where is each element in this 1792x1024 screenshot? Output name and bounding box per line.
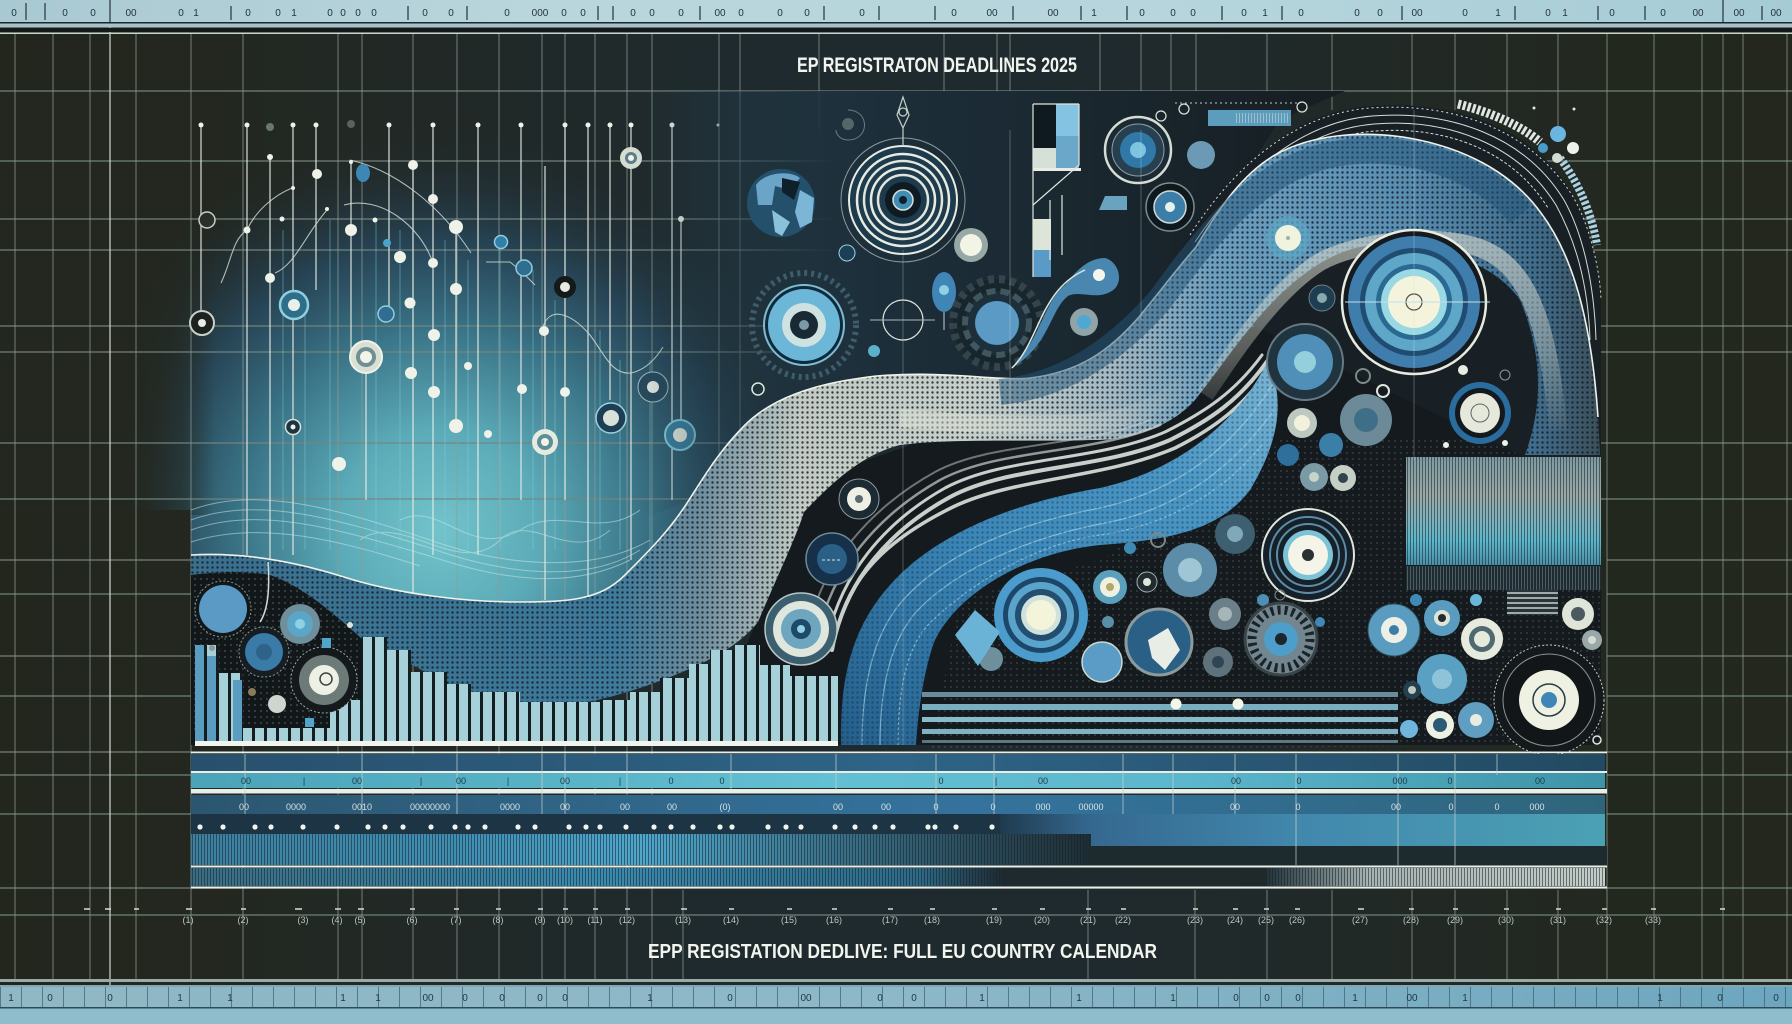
- blue row labels: 0: [933, 802, 939, 812]
- tick labels: (32): [1596, 915, 1612, 925]
- ruler digits: 00: [714, 8, 726, 19]
- bottom ruler digits: 0: [562, 993, 568, 1004]
- ruler digits: 0: [340, 8, 346, 19]
- tick labels: (15): [781, 915, 797, 925]
- tick labels: (29): [1447, 915, 1463, 925]
- hatch arc: top right: [1458, 104, 1597, 245]
- icon: globe: [747, 169, 815, 237]
- tick labels: (8): [492, 915, 504, 925]
- tick labels: (7): [450, 915, 462, 925]
- tick labels: (17): [882, 915, 898, 925]
- ruler digits: 1: [291, 8, 297, 19]
- icon: large blue target: [994, 568, 1088, 662]
- tick labels: (28): [1403, 915, 1419, 925]
- icon cluster: lower right bubbles: [1368, 594, 1604, 755]
- teal row labels: 00: [1038, 776, 1048, 786]
- icon: thin ring: [870, 300, 935, 340]
- blue row labels: 0: [1295, 802, 1301, 812]
- bottom ruler digits: 0: [537, 993, 543, 1004]
- teal row labels: 000: [1392, 776, 1408, 786]
- icon: white orb: [954, 228, 988, 262]
- tick labels: (33): [1645, 915, 1661, 925]
- wave ribbon: blue stream: [841, 360, 1278, 745]
- blue row labels: 00: [560, 802, 570, 812]
- strip: dark remainder: [1000, 846, 1607, 866]
- blue row labels: 00000000: [410, 802, 450, 812]
- blue row labels: 00: [620, 802, 630, 812]
- tick labels: (13): [675, 915, 691, 925]
- ruler digits: 000: [532, 8, 549, 19]
- wave ribbon: grey stripes: [810, 355, 1270, 650]
- tick labels: (30): [1498, 915, 1514, 925]
- strip: dark blue row: [191, 754, 1605, 771]
- blue row labels: [239, 802, 1545, 812]
- bottom ruler digits: 0: [1717, 993, 1723, 1004]
- blue row labels: 0000: [286, 802, 306, 812]
- blue row labels: 00: [667, 802, 677, 812]
- bottom ruler digits: 1: [647, 993, 653, 1004]
- icon: dark blue orb: [806, 533, 858, 585]
- ruler digits: 1: [1495, 8, 1501, 19]
- ruler digits: [11, 8, 1782, 19]
- tick labels: (25): [1258, 915, 1274, 925]
- bottom ruler digits: [8, 993, 1779, 1004]
- tick labels: (31): [1550, 915, 1566, 925]
- ruler digits: 0: [1354, 8, 1360, 19]
- small nodes: [209, 622, 353, 727]
- ribbon white lower strip: [900, 375, 1195, 425]
- icon: white ring target: [765, 593, 837, 665]
- node cluster: top right: [1532, 106, 1579, 163]
- ribbon white contour: [191, 134, 1598, 602]
- teal row labels: 0: [1447, 776, 1453, 786]
- ruler digits: 0: [1139, 8, 1145, 19]
- icon: data strip: [1156, 102, 1307, 126]
- ruler digits: 00: [1770, 8, 1782, 19]
- ruler digits: 0: [804, 8, 810, 19]
- icon: small blue orb: [1070, 308, 1098, 336]
- bottom ruler digits: 0: [727, 993, 733, 1004]
- ruler digits: 0: [678, 8, 684, 19]
- teal row labels: 00: [1535, 776, 1545, 786]
- blue row labels: 0010: [352, 802, 372, 812]
- tick labels: (4): [332, 915, 343, 925]
- ruler digits: 0: [327, 8, 333, 19]
- ruler digits: 0: [245, 8, 251, 19]
- ruler digits: 00: [1733, 8, 1745, 19]
- stacked stripe block: [1406, 457, 1601, 590]
- ruler digits: 0: [371, 8, 377, 19]
- strip: lower stripes: [191, 868, 1001, 886]
- icon cluster: upper centre: [747, 97, 1307, 395]
- icon: big blue lens: [752, 273, 856, 377]
- ruler digits: 0: [580, 8, 586, 19]
- tick labels: [182, 915, 1661, 925]
- blue row labels: 0: [990, 802, 996, 812]
- blue row labels: 0000: [500, 802, 520, 812]
- strip: white hatch: [1267, 868, 1605, 886]
- bottom ruler digits: 1: [375, 993, 381, 1004]
- ruler digits: 0: [90, 8, 96, 19]
- ruler digits: 0: [1660, 8, 1666, 19]
- icon: small tab: [1099, 196, 1127, 210]
- icon: pearl: [268, 695, 286, 713]
- bottom ruler digits: 00: [1406, 993, 1418, 1004]
- bottom ruler digits: 0: [107, 993, 113, 1004]
- ribbon dark blue upper shade: [1000, 151, 1520, 392]
- baseline: [195, 741, 838, 746]
- bottom ruler digits: 1: [340, 993, 346, 1004]
- blue row labels: (0): [720, 802, 731, 812]
- curved stem: [260, 562, 269, 622]
- blue row labels: 00: [1391, 802, 1401, 812]
- bubbles: [979, 514, 1325, 682]
- icon: spiral target: [841, 138, 965, 262]
- ruler digits: 0: [1190, 8, 1196, 19]
- bottom ruler: [0, 979, 1792, 1024]
- tick labels: (11): [587, 915, 603, 925]
- bottom ruler digits: 1: [8, 993, 14, 1004]
- ruler ticks: [26, 0, 1762, 22]
- tick labels: (1): [182, 915, 194, 925]
- blue row labels: 00000: [1078, 802, 1104, 812]
- timeline curves: [221, 160, 663, 373]
- icon: blue target: [1146, 183, 1194, 231]
- ruler digits: 0: [1241, 8, 1247, 19]
- ruler digits: 00: [1047, 8, 1059, 19]
- bottom ruler digits: 00: [800, 993, 812, 1004]
- ruler digits: 00: [1411, 8, 1423, 19]
- teal row labels: 00: [352, 776, 362, 786]
- bubbles: [1277, 285, 1510, 491]
- tick labels: (2): [238, 915, 249, 925]
- tick labels: (18): [924, 915, 940, 925]
- tick labels: (19): [986, 915, 1002, 925]
- icon: blue lens: [1267, 324, 1343, 400]
- strip: solid block: [1000, 814, 1605, 846]
- icon: small nodes: [752, 245, 880, 395]
- icon: compass pin: [897, 97, 909, 146]
- blue row labels: 0: [1448, 802, 1454, 812]
- icon: dotted orb: [1163, 543, 1217, 597]
- panel: teal glow backdrop: [20, 100, 860, 630]
- bottom ruler digits: 0: [1233, 993, 1239, 1004]
- bottom ruler digits: 0: [1295, 993, 1301, 1004]
- pale stems: [283, 220, 650, 550]
- bottom ruler digits: 1: [1657, 993, 1663, 1004]
- tick labels: (6): [406, 915, 418, 925]
- bottom ruler digits: 1: [227, 993, 233, 1004]
- ruler digits: 1: [1562, 8, 1568, 19]
- ruler digits: 0: [1545, 8, 1551, 19]
- teal row labels: 00: [456, 776, 466, 786]
- subtitle: EPP REGISTATION DEDLIVE: FULL EU COUNTRY CALENDAR: [648, 941, 1157, 963]
- panel: lower right dark field: [740, 250, 1601, 750]
- dot row markers: [197, 824, 995, 830]
- strip: teal row: [191, 773, 1605, 788]
- timeline ring markers: [190, 120, 695, 455]
- teal row labels: [241, 776, 1545, 786]
- tick labels: (16): [826, 915, 842, 925]
- ruler digits: 0: [504, 8, 510, 19]
- teal row labels: 0: [1296, 776, 1302, 786]
- icon: ringed target: [1449, 382, 1511, 444]
- bar chart: histogram: [195, 637, 838, 746]
- teal row labels: 0: [719, 776, 725, 786]
- icon: white eye: [839, 479, 879, 519]
- small stripe block: [1507, 590, 1558, 615]
- ruler digits: 0: [1298, 8, 1304, 19]
- icon: white swirl: [291, 647, 357, 713]
- bottom ruler digits: 00: [422, 993, 434, 1004]
- ruler digits: 0: [1462, 8, 1468, 19]
- ruler digits: 0: [1609, 8, 1615, 19]
- tick labels: (5): [354, 915, 366, 925]
- strip: blue label row: [191, 795, 1605, 814]
- icon: highlight dot: [1266, 216, 1310, 260]
- icon: blue disc: [195, 581, 251, 637]
- ruler digits: 0: [630, 8, 636, 19]
- tick labels: (9): [534, 915, 546, 925]
- row verticals: [245, 754, 1497, 865]
- tick labels: (23): [1187, 915, 1203, 925]
- ruler digits: 1: [193, 8, 199, 19]
- ruler digits: 00: [986, 8, 998, 19]
- ruler digits: 0: [951, 8, 957, 19]
- tick labels: (14): [723, 915, 739, 925]
- timeline top dots: [198, 122, 720, 471]
- ribbon white inner arc: [1205, 240, 1558, 430]
- icon: small satellite dot: [836, 110, 864, 140]
- top ruler: [0, 0, 1792, 34]
- bottom ruler digits: 0: [1773, 993, 1779, 1004]
- bottom ruler digits: 1: [1076, 993, 1082, 1004]
- ruler digits: 0: [1377, 8, 1383, 19]
- wave ribbon: main flowing band: [191, 134, 1600, 704]
- strip: dot row: [191, 814, 1001, 834]
- icon cluster: lower centre bubbles: [955, 509, 1354, 682]
- blue row labels: 00: [833, 802, 843, 812]
- tick labels: (27): [1352, 915, 1368, 925]
- icon: colour blocks: [1033, 104, 1081, 277]
- icon: gear disc: [953, 279, 1041, 367]
- blue row labels: 00: [239, 802, 249, 812]
- teal row labels: 00: [1231, 776, 1241, 786]
- ruler digits: 0: [649, 8, 655, 19]
- ruler digits: 0: [1170, 8, 1176, 19]
- axis: lower tick row: [84, 909, 1725, 925]
- teal row labels: 00: [560, 776, 570, 786]
- bottom ruler digits: 1: [1352, 993, 1358, 1004]
- icon: white disc target: [1494, 645, 1604, 755]
- icon: blue swirl: [239, 627, 289, 677]
- icon: grey orb: [1187, 141, 1215, 169]
- timeline stems: [201, 125, 681, 600]
- chart: lollipop timeline: [190, 120, 720, 600]
- bottom ruler digits: 0: [47, 993, 53, 1004]
- teal row labels: 0: [938, 776, 944, 786]
- icon: black and white target: [1262, 509, 1354, 601]
- ruler digits: 1: [1091, 8, 1097, 19]
- teal row labels: |: [619, 776, 621, 786]
- teal row labels: 0: [668, 776, 674, 786]
- teal row labels: |: [420, 776, 422, 786]
- icon: ring target right: [1105, 117, 1171, 183]
- icon cluster: ribbon gap targets: [765, 479, 879, 665]
- stripe bars: lower centre: [922, 692, 1398, 743]
- icon: spoked wheel: [1245, 603, 1317, 675]
- title: EP REGISTRATON DEADLINES 2025: [797, 54, 1077, 77]
- vertical overlay lines: [903, 110, 1414, 745]
- blue row labels: 000: [1035, 802, 1051, 812]
- bottom ruler digits: 0: [1264, 993, 1270, 1004]
- strip: stripes: [191, 834, 1091, 865]
- strip rules: [191, 752, 1607, 888]
- ruler digits: 0: [355, 8, 361, 19]
- tick labels: (24): [1227, 915, 1243, 925]
- bottom ruler digits: 1: [1462, 993, 1468, 1004]
- marker dots: [1170, 698, 1182, 710]
- bottom ruler digits: 0: [462, 993, 468, 1004]
- ruler digits: 0: [62, 8, 68, 19]
- tick labels: (20): [1034, 915, 1050, 925]
- wave lines in teal field: [191, 500, 650, 579]
- blue row labels: 00: [1230, 802, 1240, 812]
- icon cluster: lower left bubbles: [195, 562, 357, 727]
- bottom ruler digits: 0: [911, 993, 917, 1004]
- ruler digits: 0: [422, 8, 428, 19]
- ruler digits: 00: [125, 8, 137, 19]
- tick labels: (21): [1080, 915, 1096, 925]
- tick labels: (22): [1115, 915, 1131, 925]
- blue row labels: 00: [881, 802, 891, 812]
- tick labels: (12): [619, 915, 635, 925]
- teal row labels: |: [995, 776, 997, 786]
- ruler digits: 0: [777, 8, 783, 19]
- icon: main eye target: [1342, 230, 1490, 374]
- ruler digits: 0: [11, 8, 17, 19]
- bottom ruler digits: 1: [177, 993, 183, 1004]
- blue row labels: 000: [1529, 802, 1545, 812]
- bottom ruler digits: 1: [1170, 993, 1176, 1004]
- ruler digits: 0: [561, 8, 567, 19]
- panel: left dark field: [191, 572, 362, 745]
- ruler digits: 0: [178, 8, 184, 19]
- left margin mask below the panel edge: [0, 510, 191, 985]
- ruler digits: 1: [1262, 8, 1268, 19]
- panel: outer arc field: [1180, 105, 1601, 460]
- tick labels: (26): [1289, 915, 1305, 925]
- icon: white-ring bead: [1093, 570, 1127, 604]
- teal row labels: |: [507, 776, 509, 786]
- ruler digits: 0: [738, 8, 744, 19]
- tick labels: (10): [557, 915, 573, 925]
- ruler digits: 00: [1692, 8, 1704, 19]
- teal row labels: |: [303, 776, 305, 786]
- bottom ruler digits: 0: [499, 993, 505, 1004]
- icon cluster: mid right bubbles: [1267, 285, 1511, 491]
- table: calendar strips: [191, 752, 1607, 888]
- icon: teal lens: [280, 604, 320, 644]
- blue bars: [195, 645, 242, 742]
- ruler digits: 0: [859, 8, 865, 19]
- icon: blue drop: [932, 272, 956, 330]
- icon: tadpole: [1012, 258, 1119, 368]
- ruler digits: 0: [275, 8, 281, 19]
- blue row labels: 0: [1494, 802, 1500, 812]
- bottom ruler digits: 0: [877, 993, 883, 1004]
- panel: upper centre dark field: [640, 91, 1345, 520]
- icon: hexagon tile: [955, 610, 1000, 666]
- teal row labels: 00: [241, 776, 251, 786]
- icon: photo orb: [1126, 609, 1192, 675]
- ruler digits: 0: [448, 8, 454, 19]
- left margin fade for the glow: [0, 90, 215, 515]
- bottom ruler digits: 1: [979, 993, 985, 1004]
- tick labels: (3): [298, 915, 309, 925]
